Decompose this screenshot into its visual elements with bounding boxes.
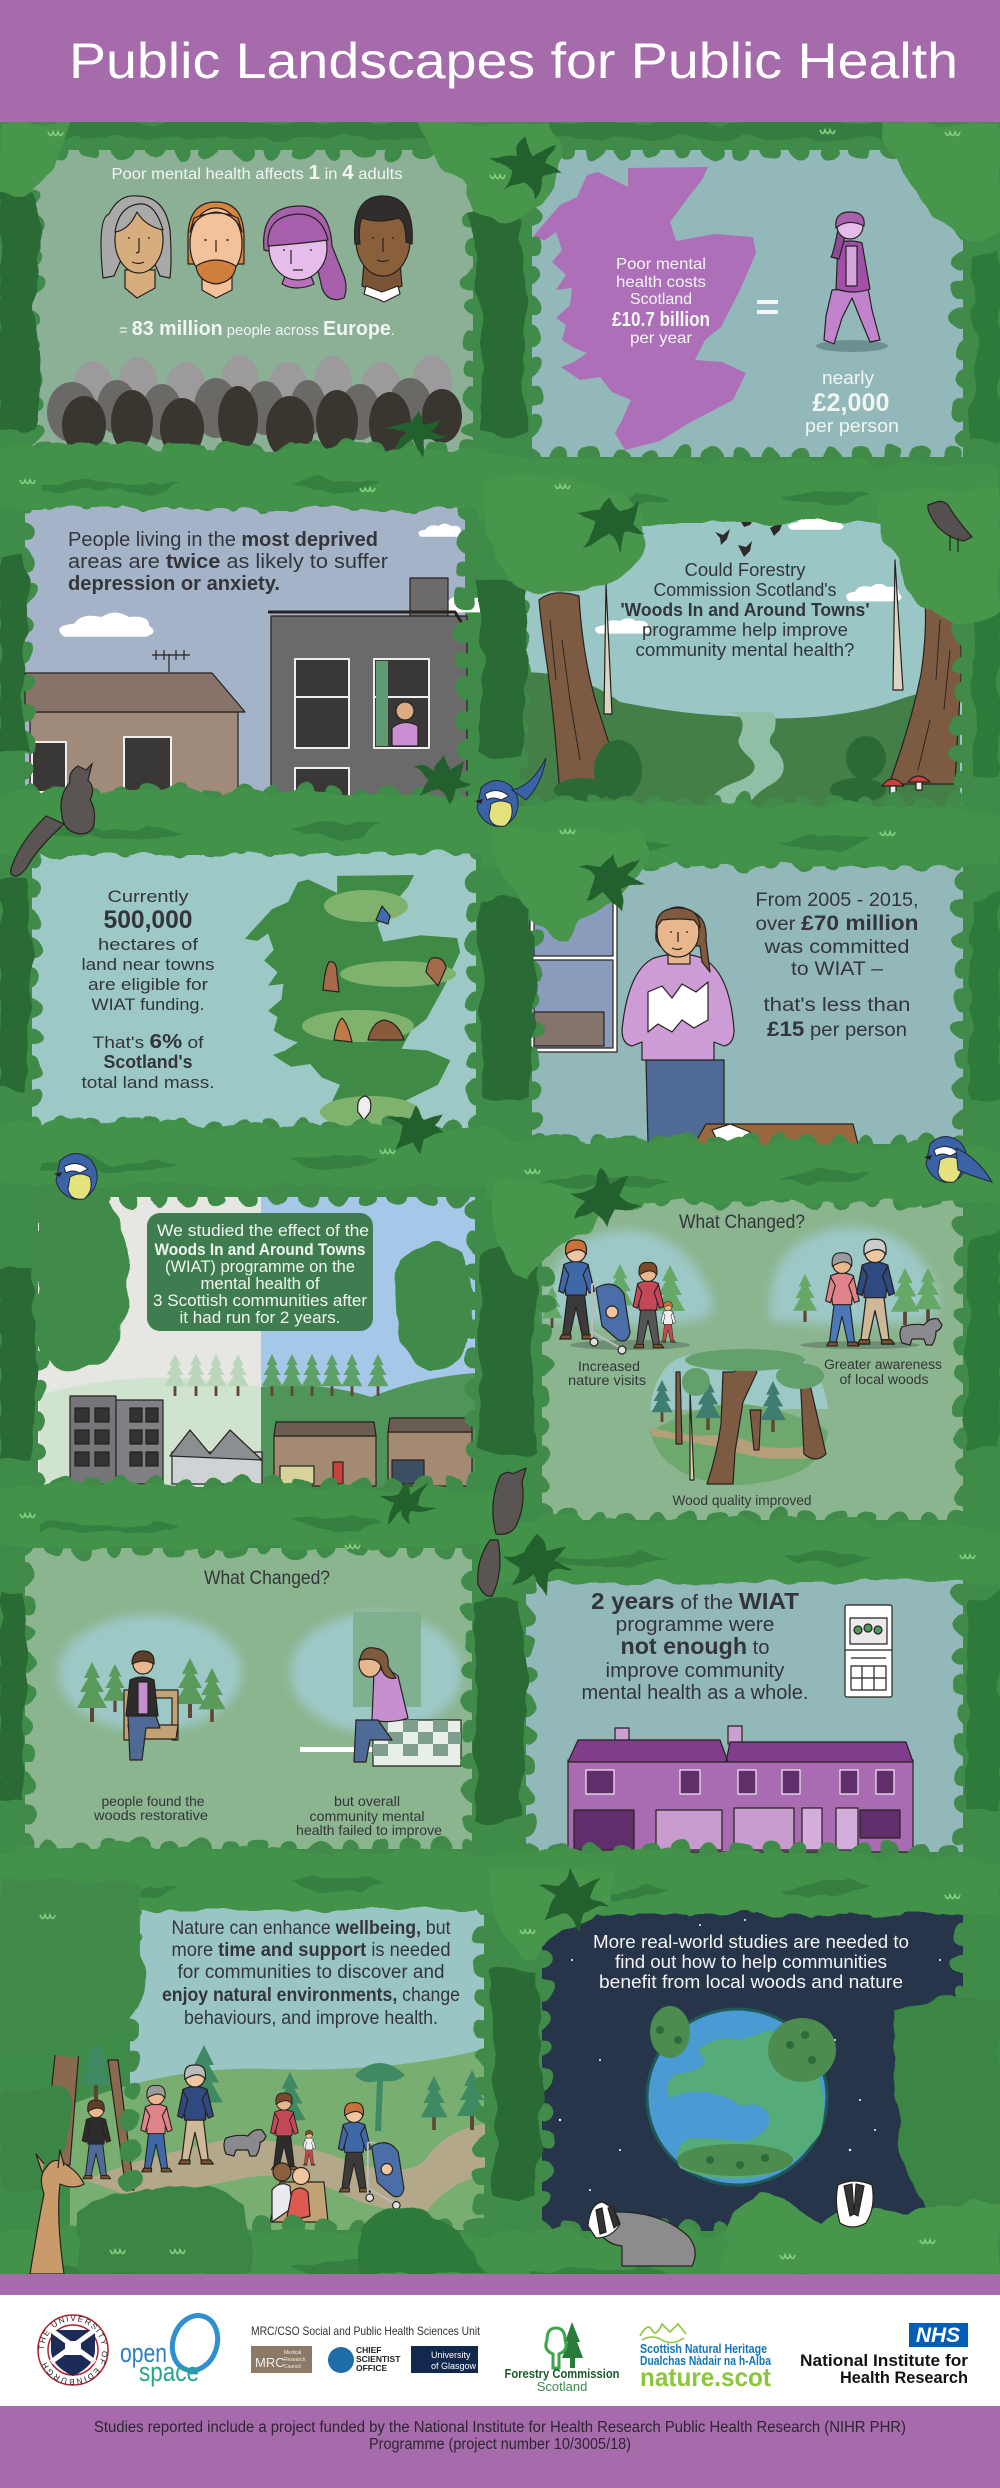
text: two years not enough [582, 1588, 808, 1704]
trees [539, 560, 961, 784]
text: more real-world studies: More real-world studies are needed to [593, 1932, 909, 1952]
text: 500,000 hectares: hectares of [98, 935, 198, 954]
clouds [59, 524, 485, 637]
clouds [595, 517, 902, 634]
logo: NHS National Institute for Health Research: NHS [916, 2324, 960, 2347]
study description box: it had run for 2 years. [180, 1309, 340, 1327]
panel: one in four adults [32, 150, 473, 460]
text: 70 million committed: that's less than [764, 995, 910, 1016]
illustration: window [530, 880, 617, 1052]
study description box [147, 1213, 373, 1331]
map: Scotland in green with woodland [245, 875, 460, 1130]
text: 70 million committed: to WIAT – [791, 959, 883, 980]
hills and path [70, 2049, 485, 2230]
logo group: MRC/CSO unit: Research [284, 2357, 306, 2363]
text: two years not enough: improve community [606, 1660, 784, 1682]
ferns [554, 736, 886, 802]
dark leaf shapes [379, 139, 648, 1929]
panel: study communities [38, 1197, 475, 1487]
funding note: Programme (project number 10/3005/18) [369, 2436, 631, 2453]
text: nature can enhance wellbeing [162, 1918, 460, 2029]
captions: health failed to improve [296, 1822, 442, 1838]
funding note: Studies reported include a project funded by the National Institute for Health Research Public Health Research (NIHR PHR) [94, 2419, 906, 2436]
walkers [82, 2065, 404, 2209]
logo group: MRC/CSO unit [251, 2324, 481, 2373]
illustration: brown shop terrace [274, 1418, 472, 1486]
logo: OPENspace: open [120, 2338, 167, 2368]
study description box: mental health of [200, 1275, 320, 1293]
text: 500,000 hectares: That's 6% of [92, 1031, 204, 1053]
heading: what changed: What Changed? [679, 1212, 805, 1233]
illustration: woman on bed by window [300, 1612, 461, 1766]
purple strip [0, 2274, 1000, 2296]
bands of leaves between rows [0, 442, 1000, 2294]
animal: crow on branch [928, 501, 972, 552]
text: two years not enough: 2 years of the WIAT [591, 1588, 799, 1614]
captions: community mental [310, 1808, 424, 1824]
title banner [0, 0, 1000, 122]
text: woods in and around towns question: 'Woods In and Around Towns' [620, 600, 870, 620]
map: Scotland in purple [532, 167, 756, 450]
text: cost to Scotland: Poor mental [616, 256, 706, 273]
heading: what changed: What Changed? [204, 1568, 330, 1589]
text: 70 million committed [756, 890, 918, 1041]
text: nearly 2,000 per person: nearly [822, 368, 874, 388]
text: 70 million committed: £15 per person [767, 1018, 907, 1041]
text: woods in and around towns question: Could Forestry [684, 560, 806, 580]
logo: OPENspace [120, 2310, 225, 2387]
text: woods in and around towns question: Commission Scotland's [654, 580, 836, 600]
text: nearly 2,000 per person [805, 368, 899, 436]
captions: Wood quality improved [672, 1493, 812, 1508]
funding note [94, 2419, 906, 2453]
footer banner [0, 2406, 1000, 2488]
text: cost to Scotland: per year [630, 330, 693, 347]
text: two years not enough: mental health as a whole. [582, 1682, 808, 1704]
mushrooms [882, 776, 930, 796]
text: 500,000 hectares: total land mass. [82, 1073, 214, 1092]
captions: woods restorative [93, 1807, 208, 1823]
panel: what changed - overall [25, 1548, 472, 1849]
captions: but overall [334, 1793, 400, 1809]
text: nature can enhance wellbeing: behaviours, and improve health. [184, 2008, 438, 2029]
animal: climbing squirrel [478, 1468, 526, 1596]
logo: University of Edinburgh: THE UNIVERSITY OF EDINBURGH [38, 2316, 108, 2385]
animal: badger walking [588, 2202, 695, 2266]
logo group: MRC/CSO unit: Council [284, 2364, 301, 2370]
icon: purple-haired woman face [264, 206, 346, 300]
illustration: grey tenement with window [268, 578, 467, 802]
couple on bench [270, 2163, 328, 2222]
text: cost to Scotland: £10.7 billion [612, 309, 710, 331]
hills behind town [40, 1373, 475, 1487]
panel: woodland question [520, 505, 962, 806]
logo: Scottish Natural Heritage nature.scot: Dualchas Nàdair na h-Alba [640, 2353, 772, 2368]
logo: OPENspace: space [139, 2357, 199, 2387]
illustration: family walking with pram [542, 1240, 690, 1354]
illustration: purple terrace [568, 1726, 913, 1852]
text: more real-world studies: benefit from local woods and nature [599, 1972, 903, 1992]
text: nature can enhance wellbeing: Nature can enhance wellbeing, but [172, 1918, 451, 1939]
animal: deer [30, 2150, 84, 2274]
illustration: older couple walking dog [793, 1239, 942, 1349]
animal: blue tit with wing raised [475, 758, 546, 826]
captions: nature visits [568, 1373, 646, 1388]
text: woods in and around towns question [620, 560, 870, 660]
panel: deprived areas street scene [25, 500, 485, 802]
study description box: 3 Scottish communities after [153, 1292, 368, 1310]
title: Public Landscapes for Public Health [69, 33, 958, 89]
panel: nature and wellbeing scene [44, 1900, 487, 2230]
text: 70 million committed: was committed [763, 937, 910, 958]
text: woods in and around towns question: community mental health? [636, 640, 854, 660]
crowd silhouettes [47, 355, 462, 460]
illustration: woman seated in woods [77, 1651, 226, 1760]
text: cost to Scotland: Scotland [630, 291, 692, 308]
captions: of local woods [840, 1372, 929, 1387]
text: 70 million committed: over £70 million [756, 912, 918, 935]
logo: Forestry Commission Scotland: Scotland [537, 2379, 587, 2394]
panel heading: 1 in 4 adults: Poor mental health affects 1 in 4 adults [112, 162, 402, 184]
animal: blue tit right [924, 1136, 992, 1182]
text: 500,000 hectares: Currently [108, 887, 189, 906]
hills [520, 672, 960, 806]
illustration: white houses [170, 1430, 262, 1484]
logo group: MRC/CSO unit: SCIENTIST [356, 2354, 401, 2364]
text: deprived areas statement: People living in the most deprived [68, 529, 378, 551]
panel: two years not enough [526, 1552, 963, 1852]
animal: badger peeping [836, 2181, 873, 2227]
tree trunk with bird [44, 1981, 134, 2190]
logo: Forestry Commission Scotland: Forestry Commission [504, 2366, 620, 2381]
logo group: MRC/CSO unit: OFFICE [356, 2363, 387, 2373]
sky vignettes [58, 1613, 462, 1733]
text: 500,000 hectares: are eligible for [88, 975, 208, 994]
logo: Scottish Natural Heritage nature.scot [640, 2324, 772, 2392]
text: 500,000 hectares: Scotland's [104, 1052, 192, 1072]
panel: eligible land [32, 846, 476, 1130]
logo group: MRC/CSO unit: CHIEF [356, 2345, 382, 2355]
icon: ginger bearded man face [188, 202, 244, 298]
captions [568, 1357, 942, 1508]
animal: squirrel looking up [11, 764, 94, 876]
icon: walking woman in purple [816, 212, 888, 352]
icon: grey-haired woman face [101, 196, 171, 298]
captions: people found the [102, 1793, 205, 1809]
logo group: MRC/CSO unit: of Glasgow [431, 2361, 477, 2371]
panel: more studies with globe [542, 1905, 963, 2231]
text: more real-world studies [593, 1932, 909, 1992]
text: two years not enough: programme were [616, 1614, 774, 1636]
captions [93, 1793, 442, 1838]
equals sign [757, 300, 778, 314]
treeline [164, 1354, 388, 1396]
study description box: Woods In and Around Towns [154, 1241, 366, 1259]
logo: Forestry Commission Scotland [504, 2322, 620, 2394]
illustration: table with papers [692, 1124, 859, 1148]
logo group: MRC/CSO unit: MRC [255, 2355, 285, 2370]
woodland path [708, 712, 784, 806]
illustration: grey flats [70, 1396, 163, 1484]
stars [559, 1919, 941, 2191]
text: 500,000 hectares: land near towns [82, 955, 214, 974]
text: cost to Scotland [612, 256, 710, 347]
logo: NHS National Institute for Health Research: National Institute for [800, 2351, 968, 2370]
logo: Scottish Natural Heritage nature.scot: Scottish Natural Heritage [640, 2341, 767, 2356]
panel: funding per person [530, 860, 963, 1148]
text: 500,000 hectares [82, 887, 214, 1092]
text: nature can enhance wellbeing: for communities to discover and [178, 1962, 444, 1983]
text: nearly 2,000 per person: per person [805, 416, 899, 436]
icon: dark-skinned man face [355, 196, 412, 302]
birds [715, 519, 783, 557]
panel: cost of poor mental health in Scotland [532, 150, 963, 457]
captions: Increased [578, 1359, 640, 1374]
logo: NHS National Institute for Health Research: Health Research [840, 2368, 968, 2387]
illustration: low brown house [25, 650, 245, 802]
text: nature can enhance wellbeing: more time and support is needed [172, 1940, 450, 1961]
logo: NHS National Institute for Health Research [800, 2323, 968, 2387]
study description box: We studied the effect of the [157, 1222, 369, 1240]
text: nature can enhance wellbeing: enjoy natural environments, change [162, 1985, 460, 2006]
text: 70 million committed: From 2005 - 2015, [756, 890, 918, 911]
trees [80, 2037, 487, 2135]
captions: Greater awareness [824, 1357, 942, 1372]
panel: deprived areas street scene: depression or anxiety. [68, 573, 280, 595]
sky vignettes [545, 1228, 938, 1325]
text: more real-world studies: find out how to help communities [615, 1952, 887, 1972]
text: cost to Scotland: health costs [616, 274, 706, 291]
illustration: globe with forests [647, 2006, 836, 2185]
text: woods in and around towns question: programme help improve [642, 620, 848, 640]
panel: deprived areas street scene: areas are twice as likely to suffer [68, 551, 388, 573]
logo group: MRC/CSO unit: MRC/CSO Social and Public Health Sciences Unit [251, 2324, 481, 2338]
text: 500,000 hectares: WIAT funding. [92, 995, 204, 1014]
text: nearly 2,000 per person: £2,000 [812, 389, 890, 417]
text: 500,000 hectares: 500,000 [104, 906, 192, 934]
logo group: MRC/CSO unit: University [431, 2350, 471, 2360]
text: 83 million people across Europe: = 83 million people across Europe. [119, 318, 395, 340]
panel: what changed - positive [542, 1197, 963, 1520]
text: two years not enough: not enough to [620, 1633, 770, 1659]
illustration: woman reading a map [622, 907, 734, 1144]
animal: blue tit left [54, 1153, 97, 1199]
illustration: improved wood [650, 1349, 828, 1485]
logo group: MRC/CSO unit: Medical [284, 2350, 301, 2356]
logos panel [0, 2295, 1000, 2406]
icon: wall calendar [845, 1605, 892, 1697]
scalloped panel edges [25, 150, 963, 2231]
logo: Scottish Natural Heritage nature.scot: nature.scot [640, 2362, 771, 2392]
study description box: (WIAT) programme on the [165, 1258, 355, 1276]
